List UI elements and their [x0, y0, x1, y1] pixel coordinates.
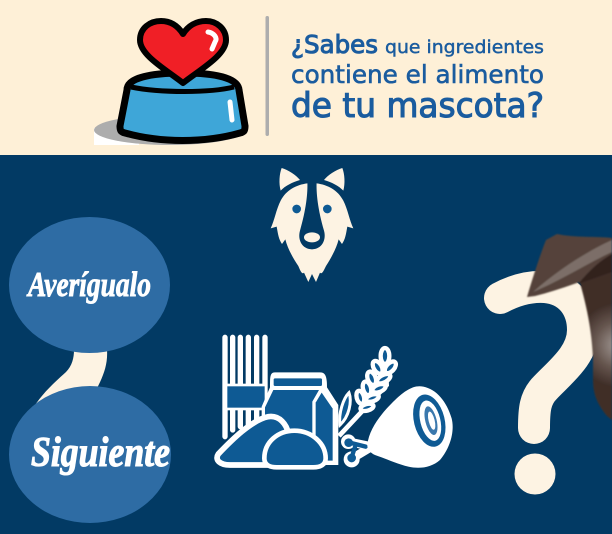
- header band: [0, 0, 612, 155]
- button label: Siguiente: [31, 430, 170, 476]
- spaghetti: [225, 337, 266, 437]
- ham bone: [341, 434, 372, 467]
- divider: [266, 16, 269, 136]
- title: [291, 30, 544, 126]
- icon: food group: [217, 337, 453, 468]
- milk carton: [262, 372, 338, 465]
- bowl: [120, 73, 245, 140]
- face: [271, 183, 353, 282]
- large question mark: [500, 287, 583, 494]
- nose: [304, 232, 320, 242]
- ear shadow: [578, 254, 612, 284]
- bread loaf: [264, 431, 326, 467]
- title line 1: ¿Sabes: [291, 30, 378, 59]
- button: Averígualo: [9, 217, 170, 353]
- dog ear: [527, 234, 612, 297]
- icon: heart in a pet bowl: [94, 21, 246, 145]
- button: Siguiente: [9, 386, 171, 523]
- ear highlight: [533, 240, 612, 292]
- bowl shadow: [94, 115, 246, 145]
- ham: [341, 386, 453, 468]
- question mark hook: [500, 287, 583, 428]
- button label: Averígualo: [26, 265, 151, 304]
- dog head: [580, 268, 612, 420]
- dog photo fragment: [527, 234, 612, 420]
- icon: dog head: [271, 168, 353, 282]
- ears: [279, 168, 345, 191]
- flour mound: [217, 416, 288, 465]
- muzzle stripe: [299, 181, 325, 249]
- main navy panel: [0, 155, 612, 534]
- title line 2: contiene el alimento: [291, 60, 544, 89]
- title line 1: que ingredientes: [385, 37, 544, 58]
- title line 3: de tu mascota?: [291, 86, 544, 126]
- question mark dot: [514, 454, 556, 494]
- heart: [140, 21, 226, 83]
- eyes: [292, 205, 332, 213]
- connector ribbon: [31, 350, 107, 412]
- wheat: [339, 348, 398, 436]
